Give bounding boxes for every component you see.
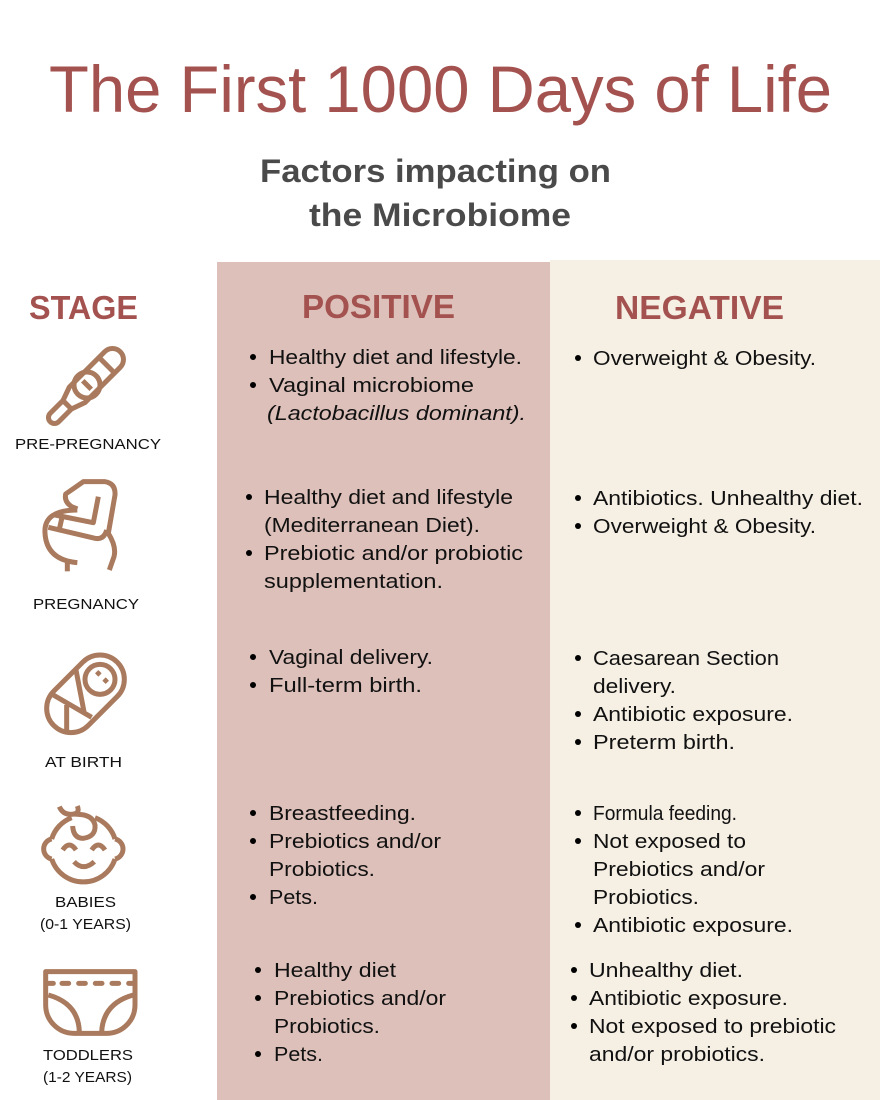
label: babies	[40, 894, 131, 933]
label: pregnancy: PREGNANCY	[33, 596, 139, 613]
positive: toddlers: Healthy diet	[274, 959, 396, 982]
icon: pregnant figure	[45, 482, 115, 571]
negative: babies: Prebiotics and/or	[593, 858, 765, 881]
negative: pre-pregnancy: Overweight & Obesity.	[593, 347, 816, 370]
panel: negative	[550, 260, 880, 1100]
negative: at birth	[575, 647, 793, 754]
negative: toddlers: Not exposed to prebiotic	[589, 1015, 836, 1038]
positive: at birth: Full-term birth.	[269, 674, 422, 697]
negative: toddlers	[571, 959, 836, 1066]
label: babies: (0-1 YEARS)	[40, 916, 131, 933]
positive: toddlers: Probiotics.	[274, 1015, 380, 1038]
positive: babies: Pets.	[269, 886, 318, 909]
icon: swaddled newborn	[37, 645, 134, 743]
negative: at birth: Antibiotic exposure.	[593, 703, 793, 726]
panel: positive	[217, 262, 550, 1100]
negative: babies: Formula feeding.	[593, 802, 737, 825]
positive: pregnancy: supplementation.	[264, 570, 443, 593]
negative: babies: Antibiotic exposure.	[593, 914, 793, 937]
negative: toddlers: Unhealthy diet.	[589, 959, 743, 982]
negative: at birth: delivery.	[593, 675, 676, 698]
label: toddlers	[43, 1047, 133, 1086]
subtitle	[260, 153, 611, 233]
positive: pregnancy: (Mediterranean Diet).	[264, 514, 480, 537]
subtitle: Factors impacting on	[260, 153, 611, 189]
positive: pre-pregnancy	[250, 346, 526, 425]
heading: positive: POSITIVE	[302, 288, 455, 325]
positive: babies: Probiotics.	[269, 858, 375, 881]
heading: negative: NEGATIVE	[615, 289, 784, 326]
heading: stage: STAGE	[29, 289, 138, 326]
negative: at birth: Preterm birth.	[593, 731, 735, 754]
negative: babies: Not exposed to	[593, 830, 746, 853]
positive: pregnancy	[246, 486, 523, 593]
positive: pre-pregnancy: Vaginal microbiome	[269, 374, 474, 397]
negative: pregnancy	[575, 487, 863, 538]
icon: nappy	[46, 972, 135, 1033]
positive: at birth: Vaginal delivery.	[269, 646, 433, 669]
label: toddlers: (1-2 YEARS)	[43, 1069, 132, 1086]
positive: toddlers: Pets.	[274, 1043, 323, 1066]
positive: babies: Prebiotics and/or	[269, 830, 441, 853]
positive: pregnancy: Prebiotic and/or probiotic	[264, 542, 523, 565]
positive: babies	[250, 802, 441, 909]
label: babies: BABIES	[55, 894, 116, 911]
label: pre-pregnancy: PRE-PREGNANCY	[15, 436, 161, 453]
positive: pre-pregnancy: Healthy diet and lifestyle.	[269, 346, 522, 369]
positive: pregnancy: Healthy diet and lifestyle	[264, 486, 513, 509]
negative: toddlers: Antibiotic exposure.	[589, 987, 788, 1010]
icon: baby face	[44, 806, 123, 882]
label: toddlers: TODDLERS	[43, 1047, 133, 1064]
subtitle: the Microbiome	[309, 197, 571, 233]
panel: stage column	[15, 289, 161, 1086]
negative: babies	[575, 802, 793, 937]
negative: babies: Probiotics.	[593, 886, 699, 909]
negative: at birth: Caesarean Section	[593, 647, 779, 670]
positive: toddlers: Prebiotics and/or	[274, 987, 446, 1010]
positive: pre-pregnancy: (Lactobacillus dominant).	[267, 402, 526, 425]
positive: toddlers	[255, 959, 446, 1066]
icon: pregnancy test	[41, 343, 129, 431]
negative: pregnancy: Antibiotics. Unhealthy diet.	[593, 487, 863, 510]
negative: pregnancy: Overweight & Obesity.	[593, 515, 816, 538]
negative: toddlers: and/or probiotics.	[589, 1043, 765, 1066]
positive: at birth	[250, 646, 433, 697]
title: The First 1000 Days of Life	[49, 52, 832, 126]
positive: babies: Breastfeeding.	[269, 802, 416, 825]
label: at birth: AT BIRTH	[45, 754, 122, 771]
